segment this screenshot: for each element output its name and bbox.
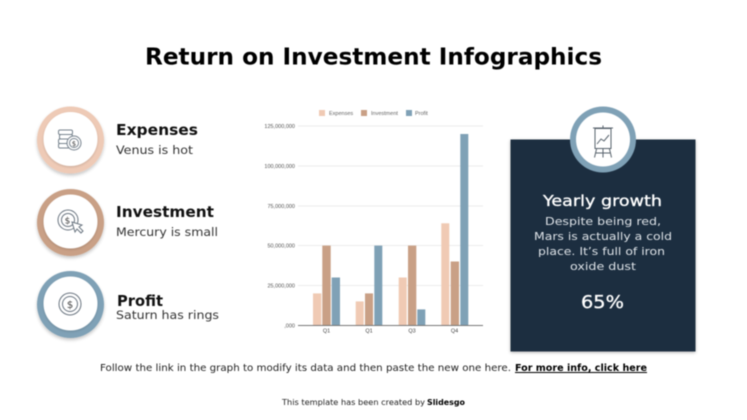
bar chart <box>264 110 483 334</box>
chart legend: Expenses <box>329 111 353 117</box>
body text: Mars is actually a cold <box>534 230 672 243</box>
text: saturn: Saturn has rings <box>116 308 219 322</box>
x axis labels: Q1 <box>365 328 373 334</box>
heading: yearly growth: Yearly growth <box>542 192 662 210</box>
footer note: For more info, click here <box>515 363 647 374</box>
body text <box>534 215 672 273</box>
text: venus: Venus is hot <box>116 143 194 157</box>
icon: profit coin in ring: $ <box>67 300 73 311</box>
panel: investment <box>37 189 218 256</box>
text: mercury: Mercury is small <box>116 225 218 239</box>
panel: expenses <box>37 106 198 174</box>
x axis labels: Q3 <box>408 328 416 334</box>
chart legend: Profit <box>415 111 428 117</box>
footer note: Follow the link in the graph to modify its data and then paste the new one here. <box>100 363 511 374</box>
credit line: Slidesgo <box>427 398 465 407</box>
body text: oxide dust <box>570 260 637 273</box>
y axis labels: ,000 <box>284 324 295 330</box>
icon: investment target in ring: $ <box>65 216 70 226</box>
icon: coins in ring: $ <box>72 140 76 148</box>
title: Return on Investment Infographics <box>145 44 602 70</box>
body text: place. It’s full of iron <box>538 245 665 258</box>
panel: profit <box>37 271 219 338</box>
y axis labels: 100,000,000 <box>264 164 295 170</box>
chart legend <box>319 110 428 117</box>
heading: investment: Investment <box>116 203 214 221</box>
icon: presentation chart in ring <box>570 106 636 172</box>
icon: profit coin in ring <box>37 271 104 338</box>
icon: investment target in ring <box>37 189 104 256</box>
credit line: This template has been created by <box>281 398 426 407</box>
investment bars <box>322 246 459 325</box>
heading: profit: Profit <box>117 292 163 310</box>
y axis labels: 25,000,000 <box>267 284 295 290</box>
heading: expenses: Expenses <box>116 121 198 139</box>
icon: coins in ring <box>37 106 104 174</box>
stat: 65%: 65% <box>581 292 624 313</box>
y axis labels: 75,000,000 <box>267 204 295 210</box>
body text: Despite being red, <box>545 215 661 228</box>
y axis labels: 125,000,000 <box>264 124 295 130</box>
y axis labels <box>264 124 295 330</box>
expenses bars <box>313 223 449 325</box>
chart legend: Investment <box>371 111 398 117</box>
panel: yearly growth <box>510 106 696 352</box>
x axis labels: Q1 <box>323 328 330 334</box>
x axis labels <box>323 328 458 334</box>
x axis labels: Q4 <box>451 328 458 334</box>
profit bars <box>332 134 468 325</box>
panel background <box>510 140 696 352</box>
y axis labels: 50,000,000 <box>267 244 295 250</box>
